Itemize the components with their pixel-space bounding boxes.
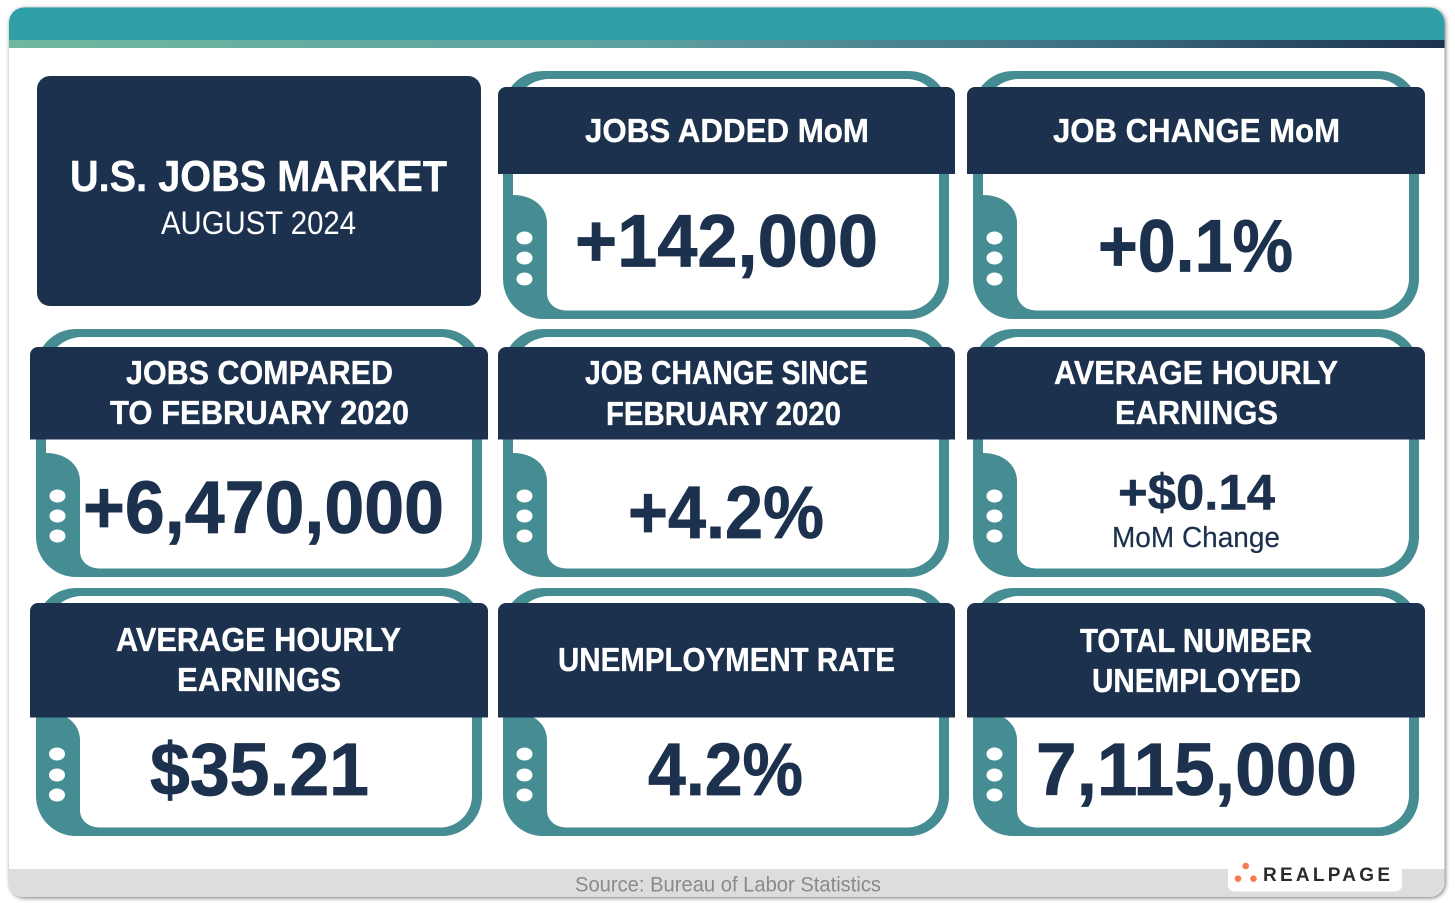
panel: total number unemployed: 7,115,000	[1036, 728, 1357, 811]
panel: jobs added MoM: JOBS ADDED MoM	[585, 112, 869, 149]
panel: total number unemployed: TOTAL NUMBER	[1080, 622, 1312, 659]
panel: job change since February 2020: JOB CHANGE SINCE	[585, 354, 868, 391]
panel: average hourly earnings	[30, 588, 488, 836]
panel: total number unemployed: UNEMPLOYED	[1092, 662, 1301, 699]
panel: average hourly earnings: EARNINGS	[177, 661, 341, 698]
heading: U.S. Jobs Market: U.S. JOBS MARKET	[70, 152, 447, 201]
logo: RealPage: REALPAGE	[1263, 865, 1390, 886]
panel: jobs added MoM	[498, 71, 955, 319]
panel: unemployment rate: UNEMPLOYMENT RATE	[558, 641, 895, 678]
panel: average hourly earnings change	[967, 329, 1425, 577]
panel: unemployment rate	[498, 588, 955, 836]
panel: jobs compared to February 2020	[30, 329, 488, 577]
panel: job change MoM: +0.1%	[1098, 204, 1293, 288]
panel: average hourly earnings change: AVERAGE HOURLY	[1054, 354, 1338, 391]
footer band	[9, 869, 1445, 897]
panel: average hourly earnings change: +$0.14	[1118, 464, 1275, 520]
panel: average hourly earnings: $35.21	[150, 728, 369, 811]
logo: RealPage	[1228, 863, 1402, 892]
panel: unemployment rate: 4.2%	[648, 728, 803, 811]
panel: jobs compared to February 2020: JOBS COMPARED	[126, 354, 393, 391]
panel: average hourly earnings change: MoM Change	[1112, 522, 1280, 554]
panel: jobs compared to February 2020: +6,470,000	[83, 466, 444, 549]
panel: jobs compared to February 2020: TO FEBRUARY 2020	[110, 394, 409, 431]
panel: average hourly earnings change: EARNINGS	[1115, 394, 1278, 431]
panel: job change since February 2020	[498, 329, 955, 577]
panel: job change MoM	[967, 71, 1425, 319]
panel: title	[37, 76, 481, 306]
subheading: date: AUGUST 2024	[161, 205, 356, 241]
panel: job change since February 2020: +4.2%	[628, 471, 824, 554]
panel: average hourly earnings: AVERAGE HOURLY	[116, 621, 401, 658]
panel: total number unemployed	[967, 588, 1425, 836]
top banner	[9, 8, 1445, 48]
panel: job change since February 2020: FEBRUARY 2020	[606, 395, 841, 432]
source note: Source: Bureau of Labor Statistics	[575, 874, 881, 896]
panel: jobs added MoM: +142,000	[575, 200, 878, 282]
panel: job change MoM: JOB CHANGE MoM	[1053, 112, 1340, 149]
